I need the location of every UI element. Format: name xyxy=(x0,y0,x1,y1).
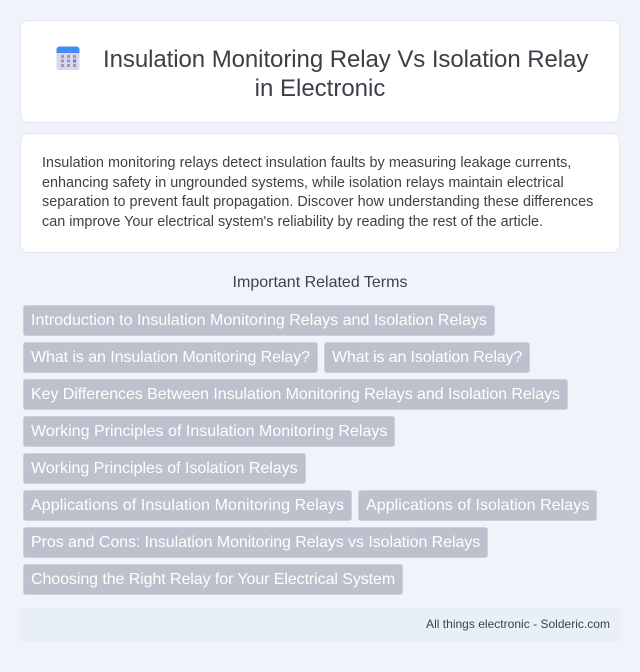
chip: working principles monitoring: Working Principles of Insulation Monitoring Relays xyxy=(31,423,387,440)
footer text: All things electronic - Solderic.com xyxy=(426,617,610,631)
chip: key differences xyxy=(23,379,568,410)
chip: key differences: Key Differences Between Insulation Monitoring Relays and Isolation Relays xyxy=(31,386,560,403)
chip: pros and cons: Pros and Cons: Insulation Monitoring Relays vs Isolation Relays xyxy=(31,534,480,551)
chip: what is isolation relay xyxy=(324,342,530,373)
summary text xyxy=(42,155,593,230)
chip: applications monitoring xyxy=(23,490,352,521)
title: in Electronic xyxy=(255,75,385,102)
chip: working principles monitoring xyxy=(23,416,395,447)
section heading: Important Related Terms xyxy=(233,274,407,291)
chip: applications monitoring: Applications of Insulation Monitoring Relays xyxy=(31,497,344,514)
chip: applications isolation xyxy=(358,490,597,521)
chip: applications isolation: Applications of Isolation Relays xyxy=(366,497,589,514)
summary text: can improve Your electrical system's reliability by reading the rest of the article. xyxy=(42,214,543,230)
icon: calendar grid xyxy=(56,46,80,70)
chip: what is insulation monitoring relay: What is an Insulation Monitoring Relay? xyxy=(31,349,310,366)
chip: choosing: Choosing the Right Relay for Your Electrical System xyxy=(31,571,395,588)
title xyxy=(103,46,588,102)
title card xyxy=(20,20,620,123)
chip: introduction: Introduction to Insulation Monitoring Relays and Isolation Relays xyxy=(31,312,487,329)
chip: choosing xyxy=(23,564,403,595)
chip: working principles isolation: Working Principles of Isolation Relays xyxy=(31,460,298,477)
chip: introduction xyxy=(23,305,495,336)
chip: pros and cons xyxy=(23,527,488,558)
chip: what is isolation relay: What is an Isolation Relay? xyxy=(332,349,522,366)
chip: what is insulation monitoring relay xyxy=(23,342,318,373)
chip: working principles isolation xyxy=(23,453,306,484)
summary text: enhancing safety in ungrounded systems, while isolation relays maintain electrical xyxy=(42,174,564,190)
summary text: Insulation monitoring relays detect insulation faults by measuring leakage currents, xyxy=(42,155,571,171)
footer bar xyxy=(20,608,620,642)
term chips xyxy=(23,305,597,595)
title: Insulation Monitoring Relay Vs Isolation Relay xyxy=(103,46,588,73)
summary card xyxy=(20,133,620,253)
summary text: separation to prevent fault propagation. Discover how understanding these differences xyxy=(42,194,593,210)
